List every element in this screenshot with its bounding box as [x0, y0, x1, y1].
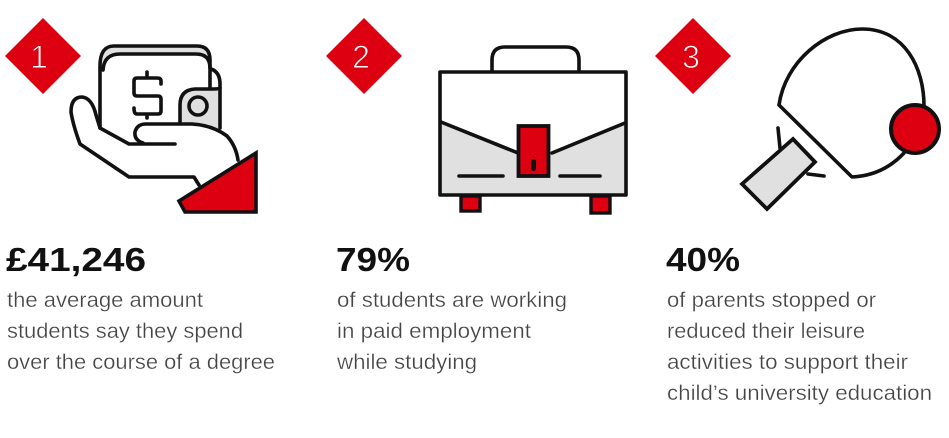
- text: parents' leisure description: of parents stopped or: [667, 288, 876, 312]
- text: paid employment description: while studying: [336, 350, 477, 374]
- stat: £41,246: £41,246: [6, 242, 146, 279]
- text: parents' leisure description: child’s university education: [667, 381, 932, 405]
- stat: 40%: 40%: [666, 242, 740, 279]
- text: parents' leisure description: reduced their leisure: [667, 319, 865, 343]
- text: average spend description: [7, 288, 275, 374]
- text: paid employment description: [336, 288, 567, 374]
- badge: number 2: [326, 18, 402, 94]
- badge: number 1: 1: [30, 39, 48, 75]
- text: paid employment description: in paid employment: [337, 319, 531, 343]
- text: parents' leisure description: [667, 288, 932, 405]
- icon: hand holding wallet: [71, 46, 256, 212]
- text: paid employment description: of students are working: [337, 288, 567, 312]
- icon: table tennis paddle and ball: [742, 29, 939, 209]
- stat: 79%: 79%: [336, 242, 410, 279]
- panel: average spend: [5, 18, 275, 374]
- text: parents' leisure description: activities to support their: [667, 350, 908, 374]
- panel: paid employment: [326, 18, 626, 374]
- text: average spend description: over the course of a degree: [7, 350, 275, 374]
- badge: number 3: [655, 18, 731, 94]
- text: average spend description: students say they spend: [7, 319, 243, 343]
- panel: parents' leisure activities: [655, 18, 939, 405]
- badge: number 2: 2: [352, 39, 370, 75]
- text: average spend description: the average amount: [7, 288, 203, 312]
- badge: number 1: [5, 18, 81, 94]
- badge: number 3: 3: [682, 39, 700, 75]
- icon: briefcase: [440, 47, 626, 213]
